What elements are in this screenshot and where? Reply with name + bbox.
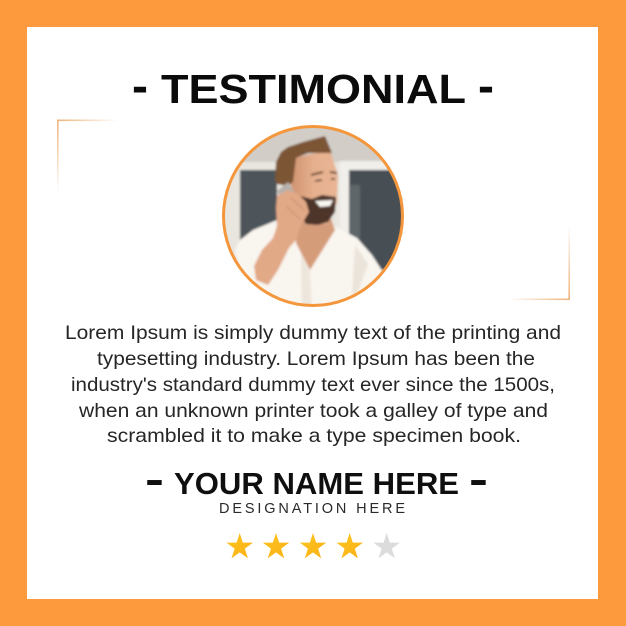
- star rating: 4 of 5: [226, 533, 400, 558]
- eyes and brows: [311, 172, 337, 175]
- name heading: -: [145, 456, 164, 502]
- name heading: -: [469, 456, 488, 502]
- star 5: [373, 533, 400, 558]
- face: [290, 150, 338, 224]
- corner accent: top left: [57, 120, 118, 192]
- designation: DESIGNATION HERE: [219, 501, 405, 517]
- testimonial body text: Lorem Ipsum is simply dummy text of the printing and: [65, 322, 561, 344]
- hair: [275, 136, 332, 186]
- phone: [276, 181, 294, 196]
- testimonial body text: [65, 322, 561, 447]
- title: -: [132, 60, 148, 113]
- testimonial body text: when an unknown printer took a galley of type and: [78, 400, 548, 422]
- star 4: [336, 533, 363, 558]
- name heading: YOUR NAME HERE: [174, 467, 459, 501]
- name heading: [145, 456, 488, 502]
- smile: [315, 200, 333, 207]
- neck: [296, 216, 335, 270]
- title: -: [478, 60, 494, 113]
- testimonial body text: industry's standard dummy text ever since the 1500s,: [71, 374, 555, 396]
- portrait photo: man smiling on the phone: [220, 124, 406, 312]
- corner accent: bottom right: [509, 225, 570, 300]
- hand and arm: [254, 190, 309, 285]
- testimonial body text: scrambled it to make a type specimen book.: [107, 425, 521, 447]
- star 1: [226, 533, 253, 558]
- title: TESTIMONIAL: [161, 66, 466, 112]
- star 2: [263, 533, 289, 558]
- title: [132, 60, 494, 113]
- beard: [300, 195, 336, 225]
- star 3: [300, 533, 326, 558]
- testimonial body text: typesetting industry. Lorem Ipsum has been the: [97, 348, 535, 370]
- shirt: [235, 220, 383, 312]
